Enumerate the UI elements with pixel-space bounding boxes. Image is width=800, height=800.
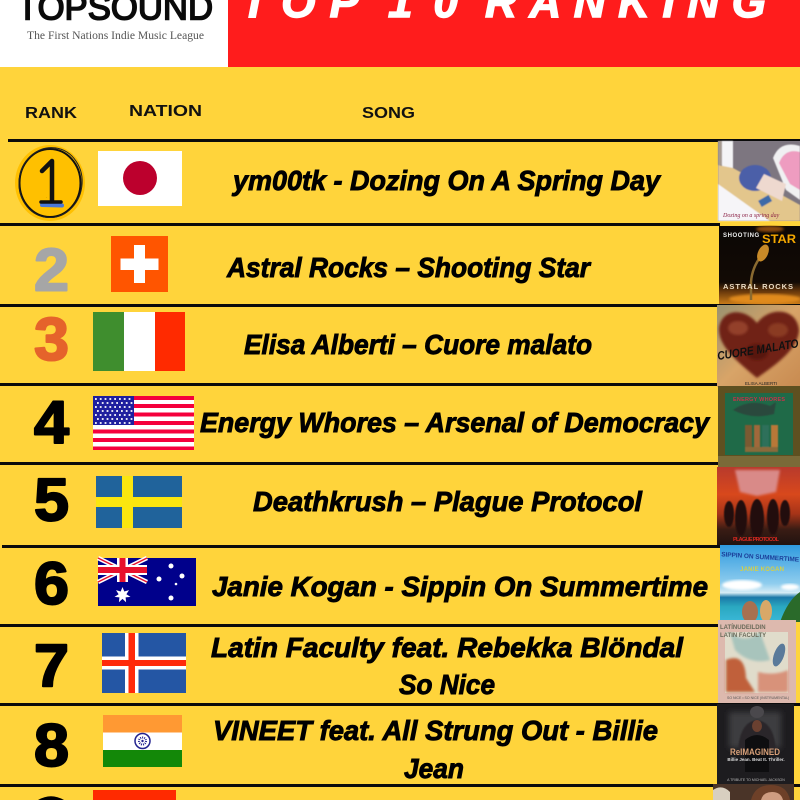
flag: India [103,715,182,767]
heading: rank: RANK [25,105,78,122]
column headings [25,103,415,122]
cover art 6: JANIE KOGAN [740,567,784,573]
row 8: India [34,704,794,784]
cover art 1 [718,141,800,221]
cover art 4: ENERGY WHORES [733,397,785,403]
rank 9 [38,796,64,800]
cover art 5 [717,467,800,545]
song 4: Energy Whores – Arsenal of Democracy [200,407,710,438]
cover art 2: STAR [762,232,796,246]
row 7: Iceland [34,620,796,703]
cover art 8: A TRIBUTE TO MICHAEL JACKSON [727,778,785,782]
song 5: Deathkrush – Plague Protocol [253,486,643,517]
row 1: Japan [15,141,800,222]
row 5: Sweden [34,466,800,545]
cover art 8: Billie Jean. Beat It. Thriller. [727,757,785,762]
flag: Japan [98,151,182,206]
cover art 8 [717,704,794,784]
cover art 6 [720,545,800,623]
song 7 [211,632,684,700]
cover art 3: ELISA ALBERTI [745,381,777,386]
cover art 7 [718,620,796,703]
flag: partial red [93,790,176,800]
rank 1 medal: 1 [46,197,47,199]
cover art 8: ReIMAGINED [730,747,780,757]
song 2: Astral Rocks – Shooting Star [226,252,592,283]
flag: Iceland [102,633,186,693]
rank 1 medal [15,144,87,222]
cover art 4 [718,386,800,467]
row 4: USA [34,386,800,467]
flag: Switzerland [111,236,168,292]
cover art 1: Dozing on a spring day [722,213,780,219]
rank 6: 6 [34,550,69,617]
song 1: ym00tk - Dozing On A Spring Day [231,165,661,196]
song 7: So Nice [399,669,495,700]
cover art 3 [716,305,800,387]
song 8: Jean [404,753,464,784]
rank 4: 4 [34,389,70,456]
logo tagline: The First Nations Indie Music League [27,28,204,42]
flag: Australia [98,558,196,606]
rank 8: 8 [34,712,69,779]
header logo panel [0,0,228,67]
cover art 2: ASTRAL ROCKS [723,282,793,291]
cover art 5: PLAGUE PROTOCOL [733,537,780,543]
cover art 7: LATIN FACULTY [720,633,766,639]
song 6: Janie Kogan - Sippin On Summertime [212,571,708,602]
flag: Italy [93,312,185,371]
song 8: VINEET feat. All Strung Out - Billie [213,715,658,746]
cover art 7: LATÍNUDEILDIN [720,623,766,631]
title [241,0,766,27]
row 9: partial [38,784,794,800]
cover art 7: SO NICE • SO NICE (INSTRUMENTAL) [727,696,789,700]
cover art 9 [713,784,794,800]
rank 3: 3 [34,306,69,373]
rank 5: 5 [34,466,69,534]
cover art 2: SHOOTING [723,233,760,239]
rank 7: 7 [34,632,69,699]
header title banner [228,0,800,67]
song 8 [213,715,658,784]
heading: nation: NATION [129,103,202,120]
flag: Sweden [96,476,182,528]
cover art 2 [719,226,800,304]
flag: USA [93,396,194,450]
rank 2: 2 [34,236,69,304]
row 6: Australia [34,545,800,623]
row 3: Italy [34,305,800,387]
song 7: Latin Faculty feat. Rebekka Blöndal [211,632,684,663]
song 3: Elisa Alberti – Cuore malato [244,329,592,360]
heading: song: SONG [362,105,415,122]
row 2: Switzerland [34,226,800,304]
cover art 6: SIPPIN ON SUMMERTIME [721,551,800,564]
